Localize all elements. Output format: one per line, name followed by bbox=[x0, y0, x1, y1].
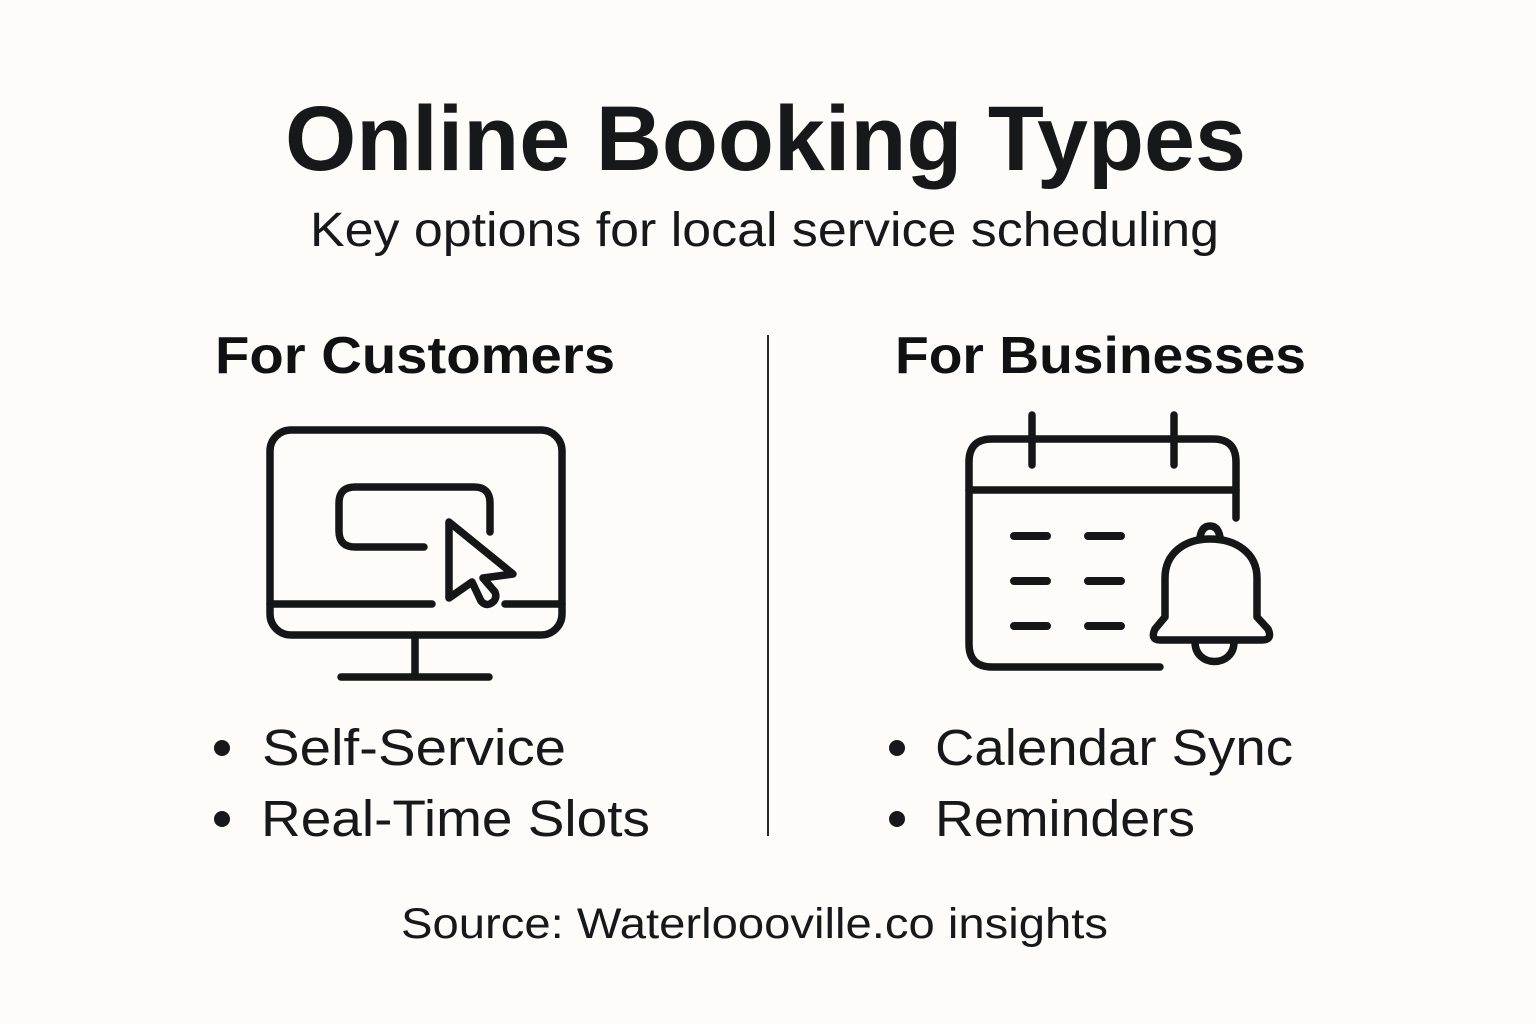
panel: for customers bbox=[214, 327, 650, 847]
bullet list: business features bbox=[889, 719, 1293, 847]
bullet list: business features: Reminders bbox=[935, 790, 1195, 847]
title: Online Booking Types bbox=[285, 88, 1246, 190]
bullet list: customer features bbox=[214, 719, 650, 847]
icon: calendar with bell bbox=[969, 415, 1270, 667]
bullet list: business features: Calendar Sync bbox=[935, 719, 1293, 776]
source note: Source: Waterloooville.co insights bbox=[401, 900, 1108, 948]
icon: monitor with cursor bbox=[270, 430, 562, 677]
bullet list: customer features: Real-Time Slots bbox=[261, 790, 650, 847]
heading: for businesses: For Businesses bbox=[895, 327, 1306, 385]
panel: for businesses bbox=[889, 327, 1306, 847]
heading: for customers: For Customers bbox=[215, 327, 615, 385]
subtitle: Key options for local service scheduling bbox=[310, 204, 1219, 257]
bullet list: customer features: Self-Service bbox=[262, 719, 566, 776]
